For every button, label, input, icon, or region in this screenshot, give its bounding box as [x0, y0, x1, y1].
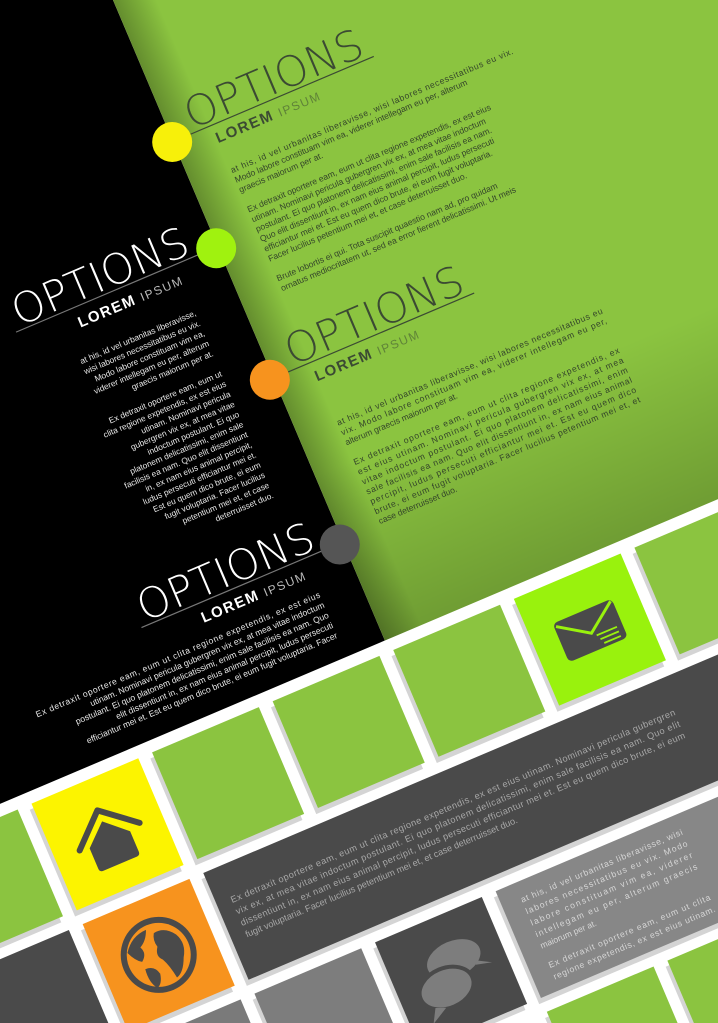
- band: dark text band: [203, 521, 718, 980]
- body text: utinam. Nominavi pericula: [139, 389, 232, 436]
- band: dark text band: Ex detraxit oportere eam, eum ut clita regione expetendis, ex est eius utinam. Nominavi pericula gubergren: [229, 707, 677, 905]
- body text: Est eu quem dico brute, ei eum: [151, 460, 262, 514]
- body text: efficiantur mei et. Est eu quem dico brute, ei eum fugit voluptaria.: [262, 148, 494, 254]
- body text: ornatus mediocritatem ut, sed ea error fierent delicatissimi. Ut meis: [279, 184, 517, 293]
- body text: vitae indoctum postulant. Ei quo platonem delicatissimi, enim: [360, 365, 629, 487]
- row 2: dark tile left: [0, 930, 114, 1023]
- row 1 tiles: [0, 502, 718, 962]
- body text: brute, ei eum fugit voluptaria. Facer lucilius petentium mei et, et: [373, 394, 642, 516]
- body text: in, ex nam eius animal percipit,: [144, 439, 253, 494]
- body text: [229, 46, 565, 293]
- body text: at his, id vel urbanitas liberavisse, wisi labores necessitatibus eu vix.: [229, 46, 515, 175]
- tile: speech bubbles: [375, 897, 527, 1023]
- body text: fugit voluptaria. Facer lucilius: [163, 470, 266, 521]
- heading: OPTIONS: [4, 217, 196, 336]
- band: grey text band: labores necessitatibus eu vix. Modo: [524, 838, 689, 916]
- body text: Ex detraxit oportere eam, eum ut clita regione expetendis, ex: [352, 345, 621, 467]
- row 3 tiles: [13, 948, 407, 1023]
- icon: speech bubbles: [404, 929, 505, 1023]
- icon: globe: [109, 905, 209, 1005]
- icon: envelope: [553, 599, 628, 662]
- heading: OPTIONS: [177, 19, 371, 139]
- body text: petentium mei et, et case: [181, 480, 271, 526]
- heading: OPTIONS: [277, 256, 471, 375]
- body text: deterruisset duo.: [214, 490, 275, 524]
- subheading: LOREM IPSUM: [213, 87, 324, 147]
- band: grey text band: maiorum per at.: [539, 918, 598, 951]
- panel: green right: [88, 0, 718, 641]
- body text: elit dissentiunt in, ex nam eius animal percipit, ludus persecuti: [114, 620, 335, 721]
- body text: case deterruisset duo.: [377, 484, 459, 526]
- body text: Ex detraxit oportere eam, eum ut: [107, 368, 224, 425]
- body text: utinam. Nominavi pericula gubergren vix ex, at mea vitae indoctum: [250, 116, 487, 224]
- subheading: LOREM IPSUM: [199, 567, 309, 627]
- body text: Brute lobortis ei qui. Tota suscipit quaestio nam ad, pro quidam: [275, 181, 499, 283]
- band: grey text band: labore constituam vim ea, viderer: [529, 850, 694, 928]
- body text: facilisis ea nam. Quo elit dissentiunt: [123, 429, 250, 491]
- body text: [71, 308, 276, 551]
- icon: house: [68, 797, 151, 876]
- band: grey text band: Ex detraxit oportere eam, eum ut clita: [547, 892, 712, 970]
- tile: yellow home: [31, 758, 184, 910]
- body text: graecis maiorum per at.: [130, 348, 215, 392]
- body text: percipit, ludus persecuti efficiantur mei et. Est eu quem dico: [369, 385, 638, 506]
- body text: graecis maiorum per at.: [237, 150, 324, 195]
- block 1: options (green top): [171, 0, 565, 303]
- heading: OPTIONS: [129, 513, 321, 631]
- body text: est eius utinam. Nominavi pericula gubergren vix ex, at mea: [356, 355, 625, 477]
- band: grey text band: [496, 618, 718, 998]
- band: grey text band: regione expetendis, ex est eius utinam.: [552, 904, 717, 981]
- band: dark text band: dissentiunt in, ex nam eius animal percipit, ludus persecuti efficiantur mei et. Est eu quem dico brute, ei eum: [239, 730, 687, 928]
- icon: yellow dot: [146, 116, 198, 168]
- body text: Ex detraxit oportere eam, eum ut clita regione expetendis, ex est eius: [34, 590, 322, 719]
- body text: utinam. Nominavi pericula gubergren vix ex, at mea vitae indoctum: [89, 600, 326, 708]
- body text: Quo elit dissentiunt in, ex nam eius animal percipit, ludus persecuti: [258, 136, 496, 244]
- icon: lime dot: [190, 222, 242, 274]
- icon: orange dot: [244, 354, 296, 406]
- tile grid: [0, 377, 718, 1023]
- band: dark text band: fugit voluptaria. Facer lucilius petentium mei et, et case deterruisset duo.: [244, 815, 519, 939]
- tile: orange globe: [83, 879, 235, 1023]
- body text: postulant. Ei quo platonem delicatissimi, enim sale facilisis ea nam.: [254, 125, 493, 234]
- band: dark text band: vix ex, at mea vitae indoctum postulant. Ei quo platonem delicatissimi, enim sale facilisis ea nam. Quo elit: [234, 719, 682, 916]
- body text: Modo labore constituam vim ea, viderer intellegam eu per, alterum: [233, 77, 469, 185]
- body text: gubergren vix ex, at mea vitae: [129, 399, 237, 452]
- row 4 tiles: [547, 864, 718, 1023]
- body text: at his, id vel urbanitas liberavisse, wisi labores necessitatibus eu: [335, 306, 604, 428]
- body text: alterum graecis maiorum per at.: [343, 391, 459, 447]
- body text: Facer lucilius petentium mei et, et case deterruisset duo.: [267, 170, 468, 264]
- body text: clita regione expetendis, ex est eius: [102, 379, 228, 440]
- body text: vix. Modo labore constituam vim ea, viderer intellegam eu per,: [339, 316, 608, 437]
- block 3: options (green middle): [270, 210, 647, 537]
- body text: Ex detraxit oportere eam, eum ut clita regione expetendis, ex est eius: [246, 102, 492, 214]
- subheading: LOREM IPSUM: [75, 272, 186, 331]
- block 2: options (black): [0, 215, 299, 567]
- body text: sale facilisis ea nam. Quo elit dissentiunt in, ex nam eius animal: [364, 375, 633, 496]
- block 4: options (black bottom): [4, 510, 359, 760]
- body text: wisi labores necessitatibus eu vix.: [81, 318, 202, 377]
- subheading: LOREM IPSUM: [312, 325, 423, 385]
- body text: Modo labore constituam vim ea,: [93, 328, 206, 384]
- body text: [335, 306, 647, 526]
- body text: platonem delicatissimi, enim sale: [128, 419, 245, 476]
- band: grey text band: at his, id vel urbanitas liberavisse, wisi: [519, 827, 684, 905]
- band: grey text band: intellegam eu per, alterum graecis: [534, 861, 699, 939]
- body text: viderer intellegam eu per, alterum: [92, 338, 210, 396]
- body text: indoctum postulant. Ei quo: [146, 409, 241, 457]
- body text: postulant. Ei quo platonem delicatissimi, enim sale facilisis ea nam. Quo: [74, 610, 330, 726]
- body text: ludus persecuti efficiantur mei et.: [141, 450, 258, 507]
- icon: grey dot: [314, 518, 366, 571]
- tile: lime mail: [514, 554, 666, 706]
- body text: at his, id vel urbanitas liberavisse,: [78, 308, 198, 366]
- body text: efficiantur mei et. Est eu quem dico brute, ei eum fugit voluptaria. Facer: [85, 630, 339, 746]
- panel: black left: [0, 0, 385, 857]
